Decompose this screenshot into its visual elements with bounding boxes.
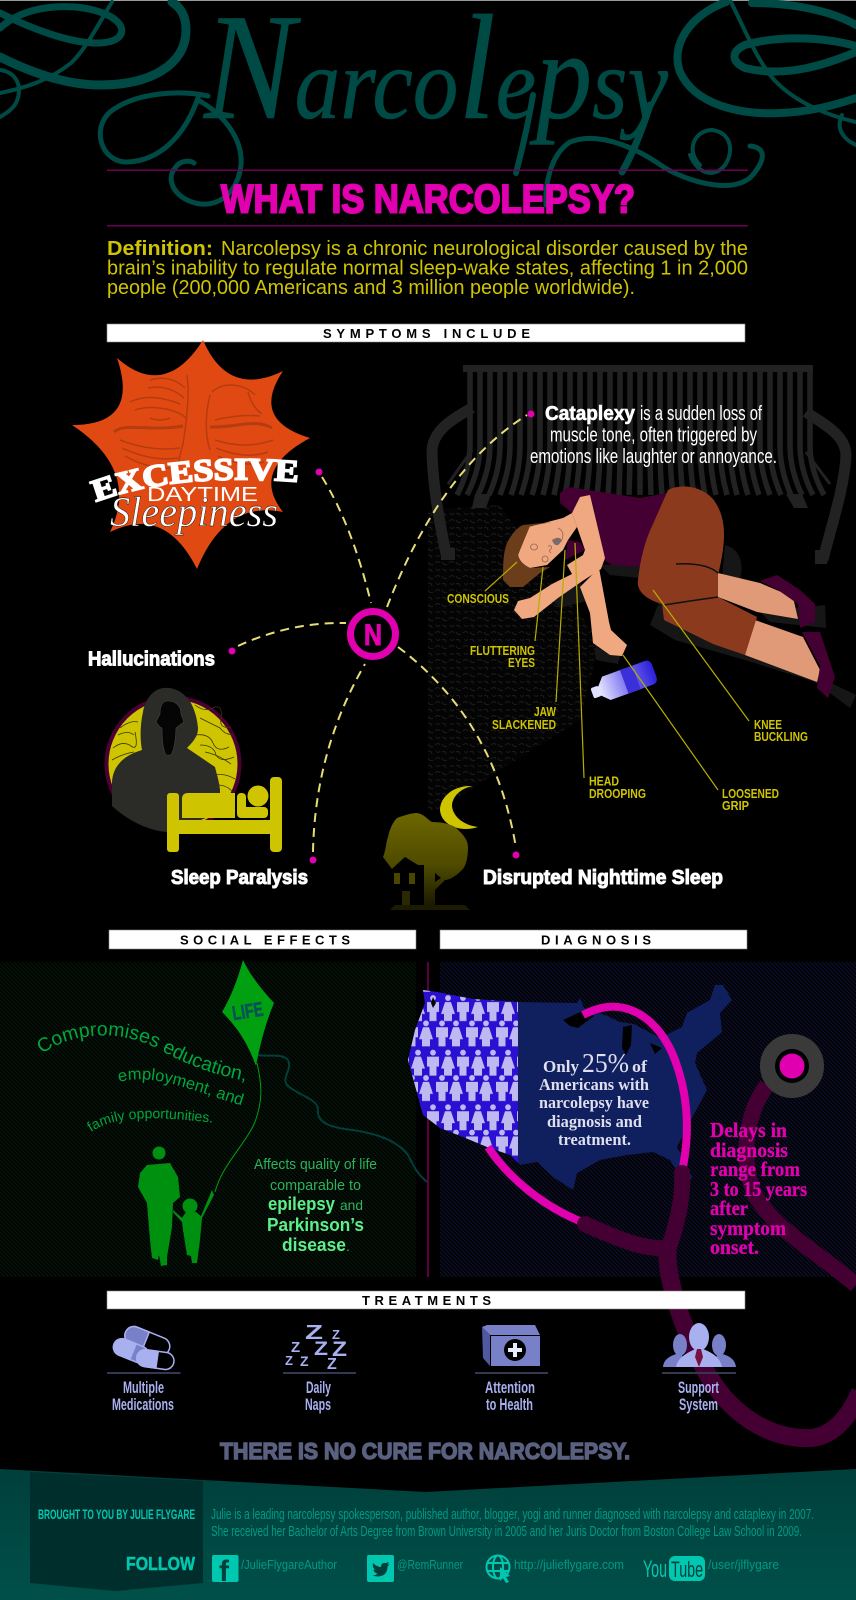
section bar: diagnosis: [440, 930, 747, 949]
illustration: moon, tree and house at night: [383, 786, 478, 910]
icon: z letters: Z: [314, 1339, 328, 1360]
annotation labels for the woman: [447, 543, 808, 813]
annotation labels for the woman: GRIP: [722, 799, 749, 813]
icon: yellow bed with sleeper: [167, 777, 282, 852]
definition text block: Definition:: [107, 238, 213, 260]
treatment: attention to health: Attention: [485, 1378, 535, 1397]
text: compromises arc: employment, and: [118, 1068, 244, 1106]
stippled shadow area: [428, 505, 600, 810]
footer panel: brought to you by: FOLLOW: [126, 1554, 195, 1574]
text: 25 percent: of: [632, 1057, 647, 1076]
section bar: treatments: [107, 1291, 745, 1309]
illustration: stethoscope: [488, 1007, 856, 1285]
section bar: symptoms include: SYMPTOMS INCLUDE: [323, 326, 530, 341]
text: 25 percent: diagnosis and: [547, 1112, 642, 1131]
section bar: social effects: SOCIAL EFFECTS: [180, 932, 350, 948]
icon: kite tail: [257, 1055, 427, 1182]
icon: z letters: [285, 1322, 347, 1373]
treatment: attention to health: to Health: [486, 1395, 533, 1414]
text: delays in diagnosis: diagnosis: [710, 1138, 788, 1162]
treatment: support system: [662, 1323, 736, 1414]
annotation labels for the woman: EYES: [508, 656, 535, 670]
treatment: multiple medications: Medications: [112, 1395, 174, 1414]
text: compromises arc: Compromises education,: [38, 1024, 244, 1083]
heading rule top: [107, 170, 748, 171]
text: delays in diagnosis: symptom: [710, 1216, 786, 1240]
social: youtube: /user/jlflygare: [708, 1557, 779, 1572]
connector: dashed lines from N hub: [238, 415, 527, 852]
text: 25 percent: Americans with: [539, 1075, 649, 1094]
illustration: sun with sleepy face: [72, 340, 310, 569]
section bar: treatments: TREATMENTS: [362, 1293, 491, 1308]
text: quality of life: .: [346, 1238, 350, 1254]
annotation labels for the woman: HEAD: [589, 774, 619, 788]
section bar: symptoms include: [107, 324, 745, 342]
treatment: support system: Support: [678, 1378, 719, 1397]
text: delays in diagnosis: range from: [710, 1157, 800, 1181]
definition text block: [107, 238, 748, 299]
text: quality of life: Parkinson’s: [267, 1215, 364, 1235]
treatment: support system: System: [679, 1395, 718, 1414]
section bar: social effects: [109, 930, 416, 949]
title: excessive daytime sleepiness: [88, 458, 298, 536]
illustration: hooded figure in moon circle: [106, 688, 240, 832]
treatment: daily naps: Daily: [306, 1378, 331, 1397]
stethoscope tube continuing below panel: [667, 1246, 856, 1438]
icon: z letters: Z: [300, 1353, 309, 1369]
text: delays in diagnosis: onset.: [710, 1235, 759, 1259]
footer panel: brought to you by: BROUGHT TO YOU BY JULIE FLYGARE: [38, 1506, 195, 1522]
panel: social effects: [0, 960, 427, 1277]
icon: father and child silhouette: [138, 1146, 214, 1266]
icon: pills: [111, 1324, 175, 1371]
text: delays in diagnosis: 3 to 15 years: [710, 1177, 807, 1201]
text: 25 percent: [539, 1048, 649, 1149]
illustration: woman collapsed with cataplexy: [503, 487, 856, 708]
annotation labels for the woman: JAW: [534, 705, 556, 719]
label: sleep paralysis: Sleep Paralysis: [171, 867, 308, 889]
text: delays in diagnosis: [710, 1118, 807, 1259]
definition text block: people (200,000 Americans and 3 million people worldwide).: [107, 277, 635, 299]
text: 25 percent: narcolepsy have: [539, 1093, 649, 1112]
text: 25 percent: Only: [543, 1057, 579, 1076]
social: twitter: [367, 1555, 464, 1582]
text: 25 percent: 25%: [582, 1048, 629, 1078]
icon: z letters: Z: [305, 1322, 323, 1344]
callout: cataplexy: is a sudden loss of: [640, 403, 762, 425]
social: youtube: Tube: [671, 1557, 703, 1582]
heading rule bottom: [107, 225, 748, 226]
text: quality of life: disease: [282, 1235, 346, 1255]
callout: cataplexy: muscle tone, often triggered by: [550, 424, 757, 446]
heading: what is narcolepsy: WHAT IS NARCOLEPSY?: [221, 178, 635, 222]
treatment: attention to health: [475, 1325, 548, 1414]
annotation labels for the woman: LOOSENED: [722, 787, 779, 801]
text: compromises arc: [38, 1024, 244, 1132]
annotation labels for the woman: KNEE: [754, 718, 782, 732]
annotation labels for the woman: DROOPING: [589, 787, 646, 801]
icon: kite: [222, 960, 274, 1066]
title: excessive daytime sleepiness: DAYTIME: [147, 484, 258, 506]
text: quality of life: and: [340, 1197, 363, 1213]
treatment: multiple medications: [107, 1324, 180, 1414]
annotation labels for the woman: FLUTTERING: [470, 644, 535, 658]
text: delays in diagnosis: Delays in: [710, 1118, 787, 1142]
illustration: water bottle: [588, 659, 659, 705]
hub: N badge: N: [364, 619, 382, 652]
title: excessive daytime sleepiness: Sleepiness: [110, 490, 278, 536]
treatment: daily naps: Naps: [305, 1395, 331, 1414]
icon: z letters: Z: [332, 1327, 340, 1342]
text: quality of life: epilepsy: [268, 1194, 335, 1214]
illustration: park bench: [432, 365, 846, 564]
definition text block: brain’s inability to regulate normal sleep-wake states, affecting 1 in 2,000: [107, 258, 748, 280]
text: quality of life: comparable to: [270, 1177, 361, 1194]
label: hallucinations: Hallucinations: [88, 648, 215, 670]
icon: z letters: Z: [327, 1356, 337, 1373]
footer panel: brought to you by: [30, 1472, 203, 1591]
social: facebook: /JulieFlygareAuthor: [241, 1557, 338, 1572]
definition text block: Narcolepsy is a chronic neurological disorder caused by the: [221, 238, 748, 260]
hub: N badge: [350, 612, 396, 656]
callout: cataplexy: emotions like laughter or annoyance.: [530, 446, 777, 468]
social: facebook: f: [219, 1555, 230, 1588]
text: quality of life: Affects quality of life: [254, 1156, 377, 1173]
icon: first aid box: [482, 1325, 540, 1366]
footer band: [0, 1469, 856, 1600]
text: 25 percent: treatment.: [558, 1130, 631, 1149]
text: delays in diagnosis: after: [710, 1196, 748, 1220]
social: twitter: @RemRunner: [397, 1557, 464, 1572]
social: website: http://julieflygare.com: [514, 1557, 624, 1572]
icon: kite string: [215, 1063, 261, 1192]
social: youtube: You: [643, 1556, 667, 1583]
callout: cataplexy: Cataplexy: [545, 403, 636, 425]
title: Narcolepsy script with flourishes: [0, 0, 856, 205]
icon: kite: LIFE: [231, 999, 265, 1025]
label: disrupted nighttime sleep: Disrupted Nighttime Sleep: [483, 867, 723, 889]
icon: z letters: Z: [332, 1338, 347, 1361]
treatment: daily naps: [283, 1322, 356, 1414]
text: compromises arc: family opportunities.: [87, 1110, 212, 1132]
annotation labels for the woman: CONSCIOUS: [447, 592, 509, 606]
map: united states: [408, 985, 732, 1190]
social: youtube: [643, 1556, 779, 1583]
social: website: [486, 1556, 624, 1583]
annotation labels for the woman: BUCKLING: [754, 730, 808, 744]
text: quality of life: [254, 1156, 377, 1255]
panel: diagnosis: [408, 962, 856, 1285]
treatment: multiple medications: Multiple: [123, 1378, 164, 1397]
title: excessive daytime sleepiness: EXCESSIVE: [88, 458, 298, 503]
annotation labels for the woman: SLACKENED: [492, 718, 556, 732]
callout: cataplexy: [530, 403, 777, 468]
section bar: diagnosis: DIAGNOSIS: [541, 932, 651, 948]
social: facebook: [212, 1555, 338, 1588]
connector end dots: [228, 410, 534, 864]
statement: no cure: THERE IS NO CURE FOR NARCOLEPSY.: [220, 1438, 630, 1464]
icon: z letters: Z: [291, 1339, 300, 1356]
icon: group of people: [663, 1323, 736, 1367]
footer biography text: [211, 1507, 814, 1540]
divider between panels: [427, 962, 429, 1277]
icon: z letters: Z: [285, 1353, 293, 1368]
